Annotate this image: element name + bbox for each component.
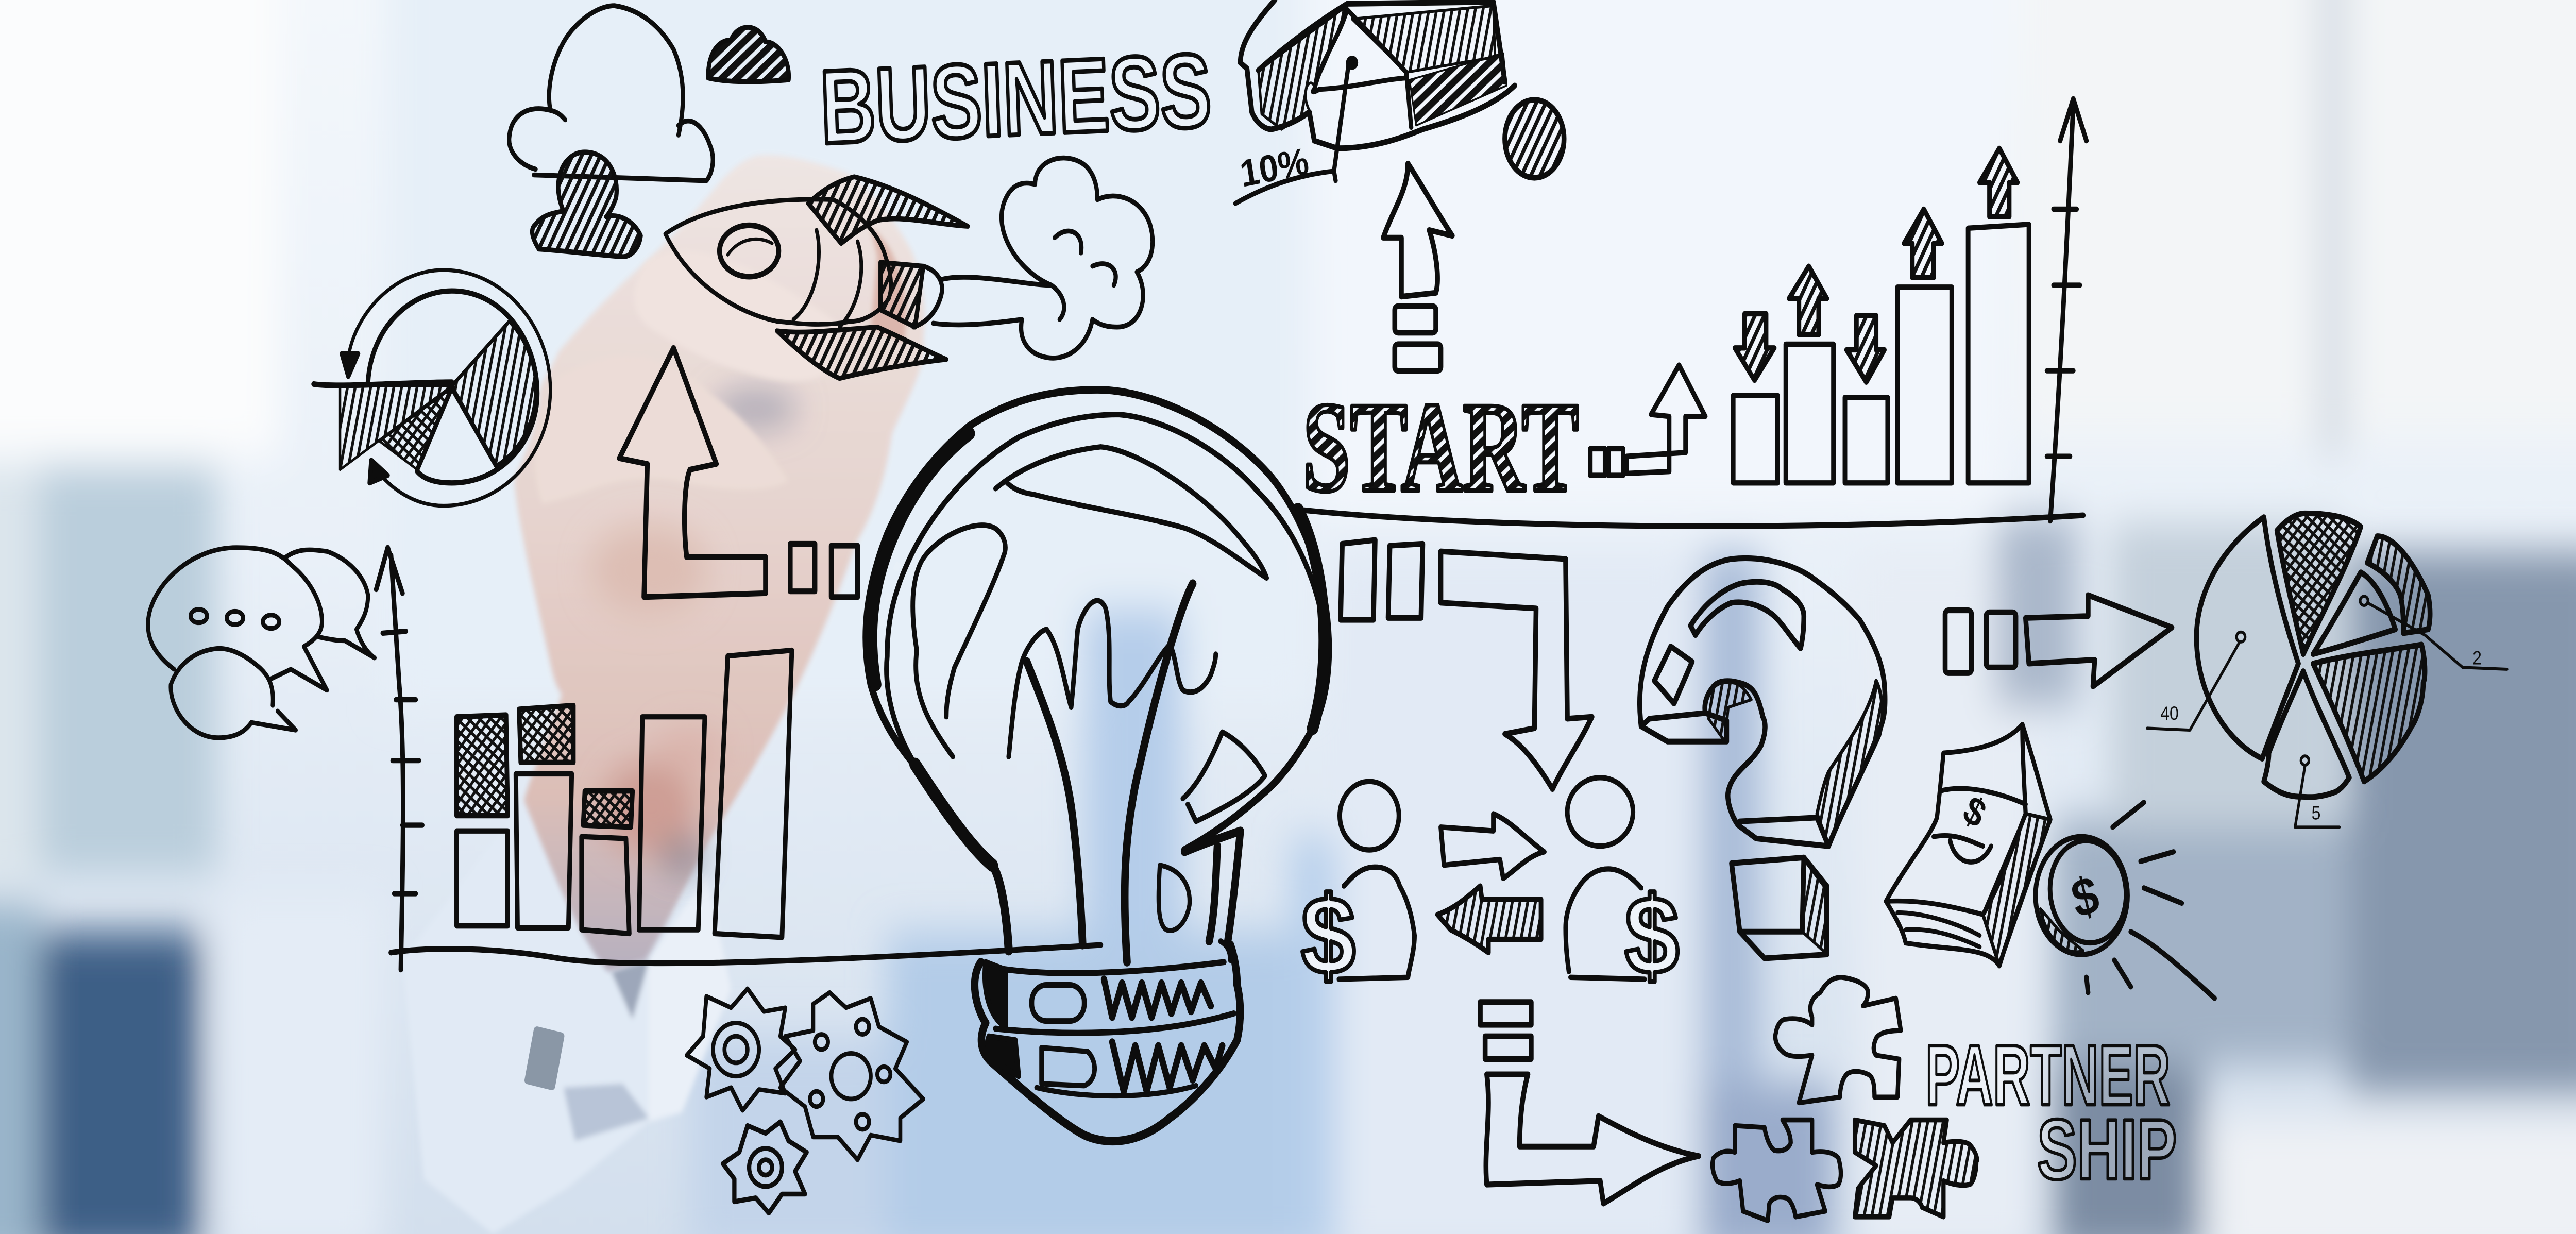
icon: rocket (665, 177, 968, 378)
chart: right pie with labels: 40 (2160, 703, 2179, 724)
chart: top 3D pie with 10%: 10% (1237, 140, 1312, 195)
icon: puzzle pieces (1713, 977, 1977, 1221)
icon: speech bubbles (148, 548, 375, 738)
chart: top 3D pie with 10% (1235, 0, 1515, 204)
chart: right pie with labels (2147, 513, 2507, 827)
arrow: to right pie (1945, 595, 2172, 686)
shirt cuff (402, 799, 731, 1234)
icon: money stack: $ (1957, 787, 1993, 837)
icon: large gear (687, 989, 795, 1110)
arrow: down right from bulb (1341, 540, 1592, 789)
icon: person with dollar right: $ (1625, 874, 1679, 997)
chart: circular pie left (314, 270, 550, 506)
icon: dollar coin with rays: $ (2066, 865, 2104, 929)
heading: PARTNER SHIP: SHIP (2037, 1102, 2177, 1197)
icon: dotted gear (781, 992, 923, 1160)
heading: PARTNER SHIP: PARTNER (1925, 1027, 2170, 1123)
chart: right pie with labels: 5 (2312, 803, 2320, 824)
heading: PARTNER SHIP (1925, 1027, 2177, 1197)
icon: small hatched cloud (708, 27, 789, 82)
heading: BUSINESS: BUSINESS (819, 32, 1213, 166)
arrows: exchange between people (1437, 814, 1544, 953)
icon: money stack (1886, 724, 2050, 966)
icon: person with dollar right (1566, 777, 1679, 997)
icon: rocket exhaust cloud (933, 158, 1153, 358)
chart: right pie with labels: 2 (2472, 648, 2482, 669)
icon: dark hatched cloud (532, 152, 641, 257)
icon: question mark (1640, 559, 1885, 958)
icon: dollar coin with rays (2036, 802, 2214, 998)
icon: hatched circle (1505, 100, 1564, 178)
hand holding pen (514, 155, 925, 972)
icon: person with dollar left (1301, 782, 1415, 997)
chart: left bar chart (376, 548, 1100, 970)
chart: start growth bars (1298, 99, 2087, 526)
heading: START: START (1303, 375, 1579, 519)
icon: person with dollar left: $ (1301, 874, 1355, 997)
arrow: left large up (619, 348, 858, 597)
icon: small gear (723, 1122, 807, 1213)
arrow: up with dashes (1383, 163, 1452, 371)
icon: cloud outline (509, 6, 713, 181)
icon: light bulb (866, 390, 1329, 1141)
arrow: bottom L arrow (1480, 1002, 1699, 1204)
